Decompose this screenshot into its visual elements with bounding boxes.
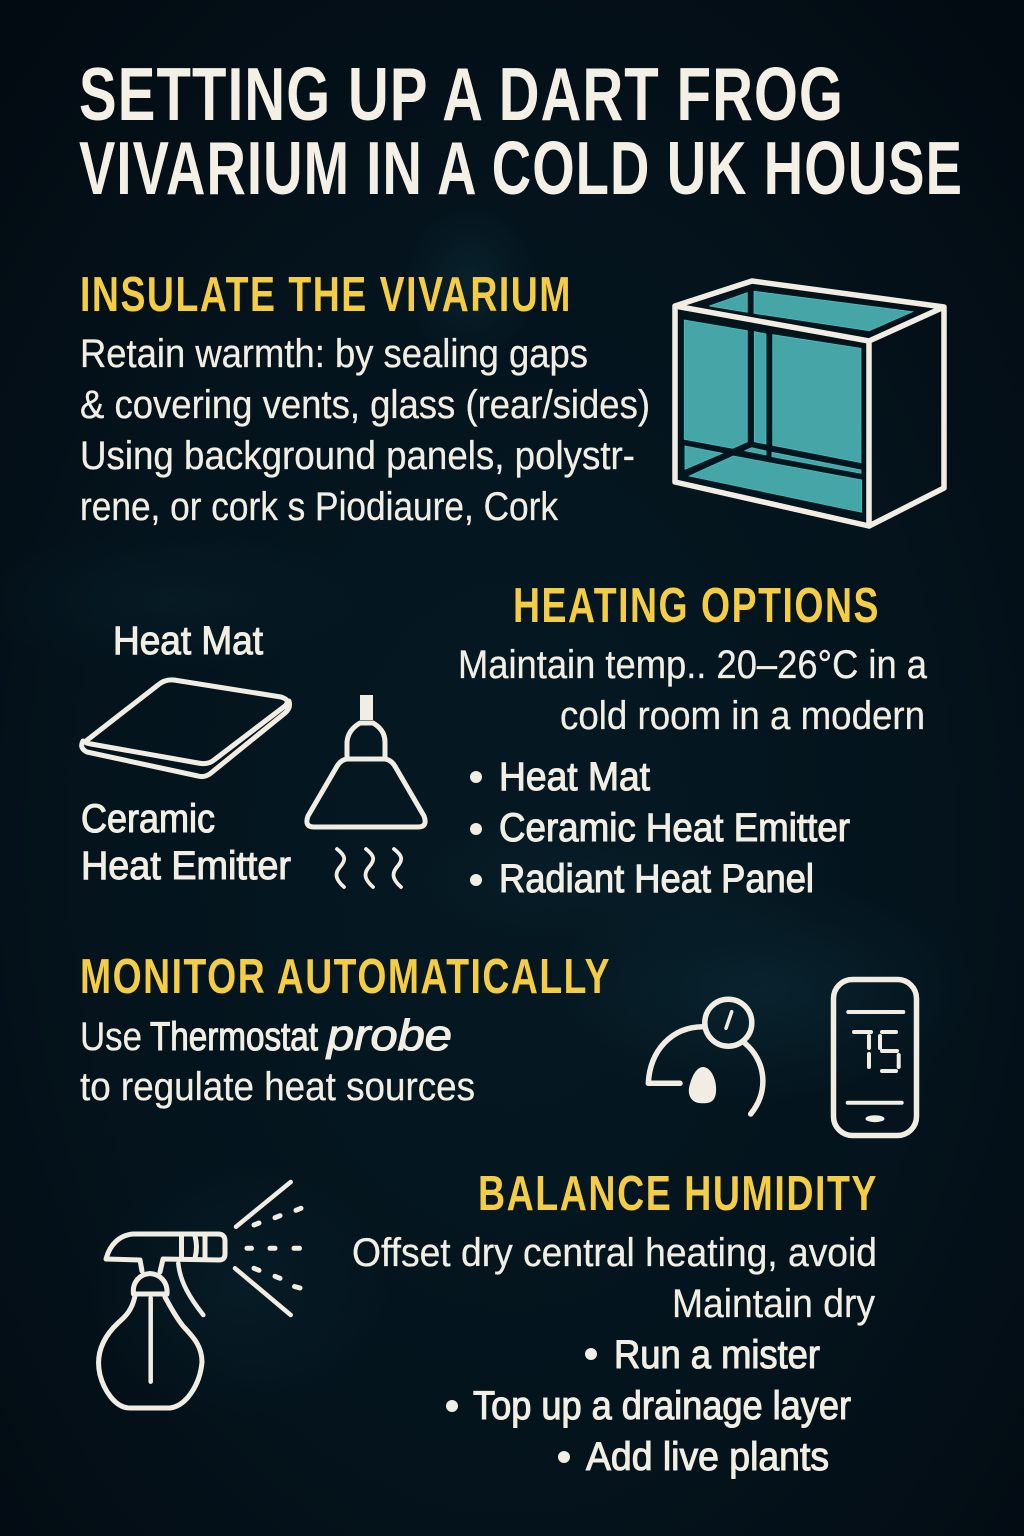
text block: heating body: cold room in a modern xyxy=(560,694,925,738)
panel: heating options xyxy=(81,579,928,901)
label: heat mat: Heat Mat xyxy=(113,619,263,663)
text block: heating body xyxy=(458,643,928,738)
text block: monitor body: to regulate heat sources xyxy=(80,1065,475,1109)
text block: insulate body: rene, or cork s Piodiaure, Cork xyxy=(80,485,559,529)
icon: phone with temperature reading xyxy=(834,980,916,1136)
heading: insulate: INSULATE THE VIVARIUM xyxy=(80,268,572,322)
text block: insulate body: & covering vents, glass (rear/sides) xyxy=(80,383,650,427)
heading: balance humidity: BALANCE HUMIDITY xyxy=(478,1167,878,1221)
label: ceramic heat emitter xyxy=(81,797,291,888)
label: ceramic heat emitter: Ceramic xyxy=(81,797,215,841)
list: humidity bullets: Add live plants xyxy=(586,1435,829,1479)
text block: insulate body: Retain warmth: by sealing gaps xyxy=(80,332,588,376)
heading: heating options: HEATING OPTIONS xyxy=(513,579,880,633)
label: ceramic heat emitter: Heat Emitter xyxy=(81,844,291,888)
icon: vivarium tank xyxy=(675,281,944,526)
panel: monitor automatically xyxy=(80,950,916,1136)
heading: monitor: MONITOR AUTOMATICALLY xyxy=(80,950,611,1004)
text block: humidity body: Maintain dry xyxy=(672,1282,875,1326)
list: heating bullets: Heat Mat xyxy=(499,755,650,799)
text block: monitor body xyxy=(80,1011,475,1109)
text block: heating body: Maintain temp.. 20–26°C in a xyxy=(458,643,928,687)
text block: monitor body: probe xyxy=(325,1011,452,1060)
panel: insulate the vivarium xyxy=(80,268,944,529)
text block: monitor body: Thermostat xyxy=(150,1015,318,1059)
text block: humidity body: Offset dry central heating, avoid xyxy=(352,1231,877,1275)
icon: spray bottle xyxy=(99,1182,301,1408)
list: humidity bullets: Run a mister xyxy=(614,1333,820,1377)
list: heating bullets: Ceramic Heat Emitter xyxy=(499,806,850,850)
text block: monitor body: Use xyxy=(80,1015,142,1059)
icon: ceramic heat lamp xyxy=(307,695,425,887)
icon: thermostat probe xyxy=(648,999,763,1114)
list: heating bullets xyxy=(470,755,850,901)
text block: insulate body xyxy=(80,332,650,529)
text block: insulate body: Using background panels, polystr- xyxy=(80,434,635,478)
panel: balance humidity xyxy=(99,1167,878,1479)
list: heating bullets: Radiant Heat Panel xyxy=(499,857,814,901)
icon: heat mat xyxy=(82,680,290,777)
list: humidity bullets: Top up a drainage layer xyxy=(473,1384,851,1428)
title xyxy=(79,52,963,210)
text block: humidity body xyxy=(352,1231,877,1326)
list: humidity bullets xyxy=(446,1333,851,1479)
